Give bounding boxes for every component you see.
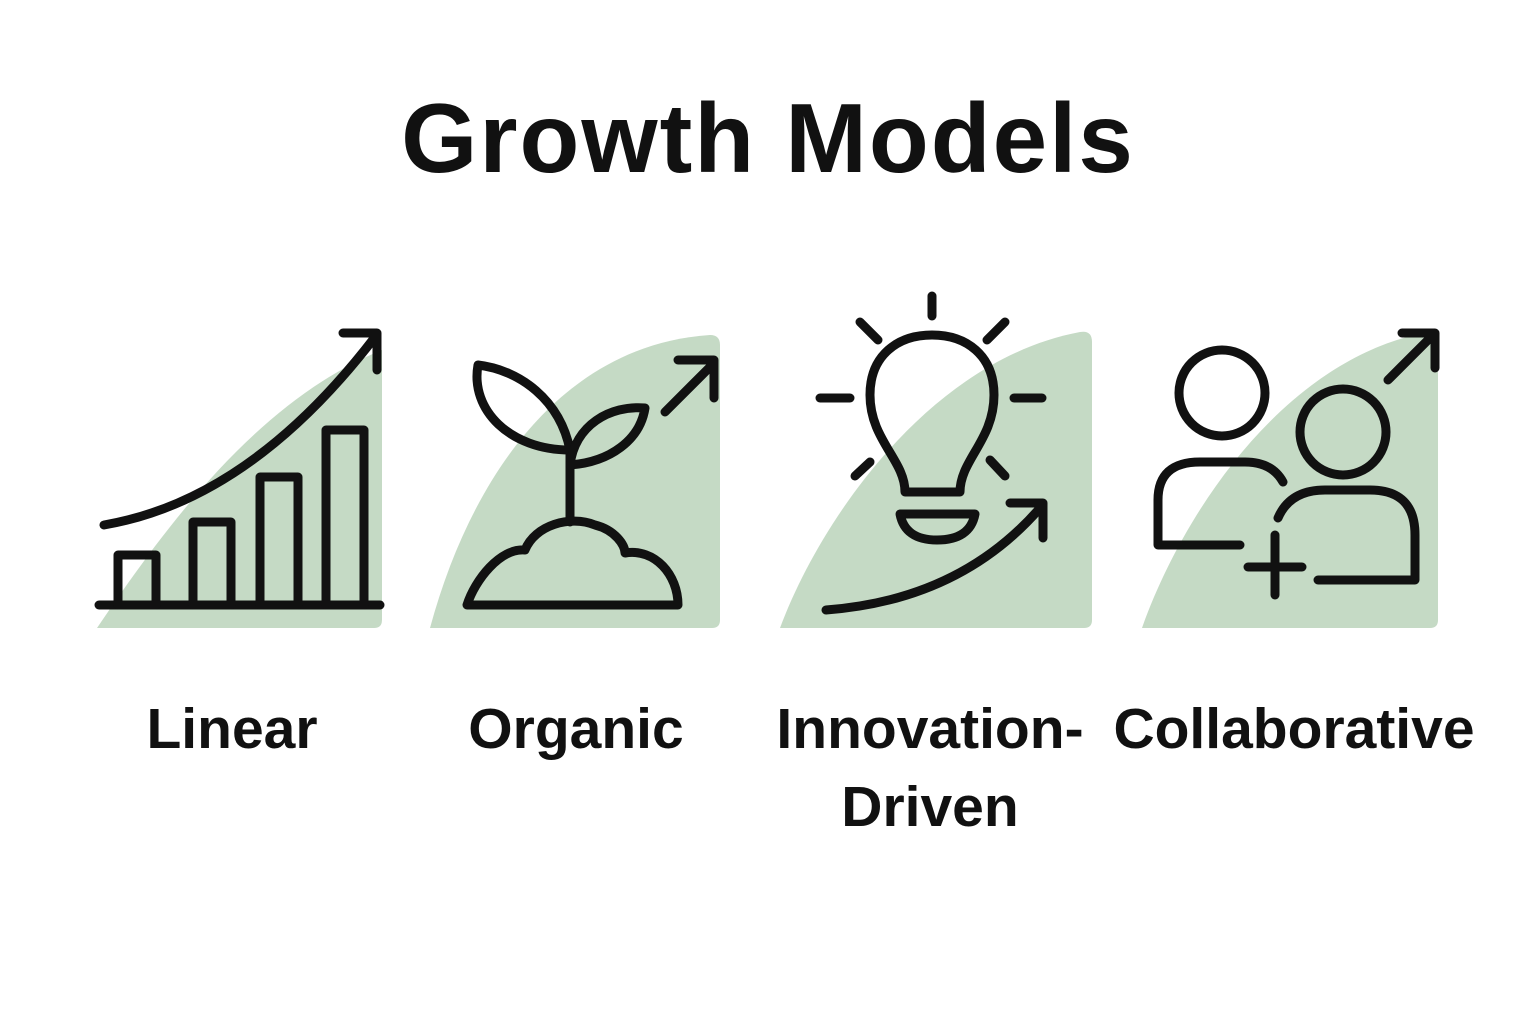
label: innovation-driven: Innovation- <box>776 697 1084 761</box>
panel: collaborative icon <box>1142 332 1438 628</box>
label: innovation-driven <box>776 697 1084 839</box>
panel: organic icon <box>430 335 720 628</box>
title: Growth Models <box>401 83 1135 193</box>
label: linear: Linear <box>146 697 318 761</box>
label: collaborative: Collaborative <box>1113 697 1475 761</box>
panel: innovation icon <box>780 296 1092 628</box>
panel: linear icon <box>97 333 382 628</box>
label: innovation-driven: Driven <box>841 775 1019 839</box>
label: organic: Organic <box>468 697 684 761</box>
